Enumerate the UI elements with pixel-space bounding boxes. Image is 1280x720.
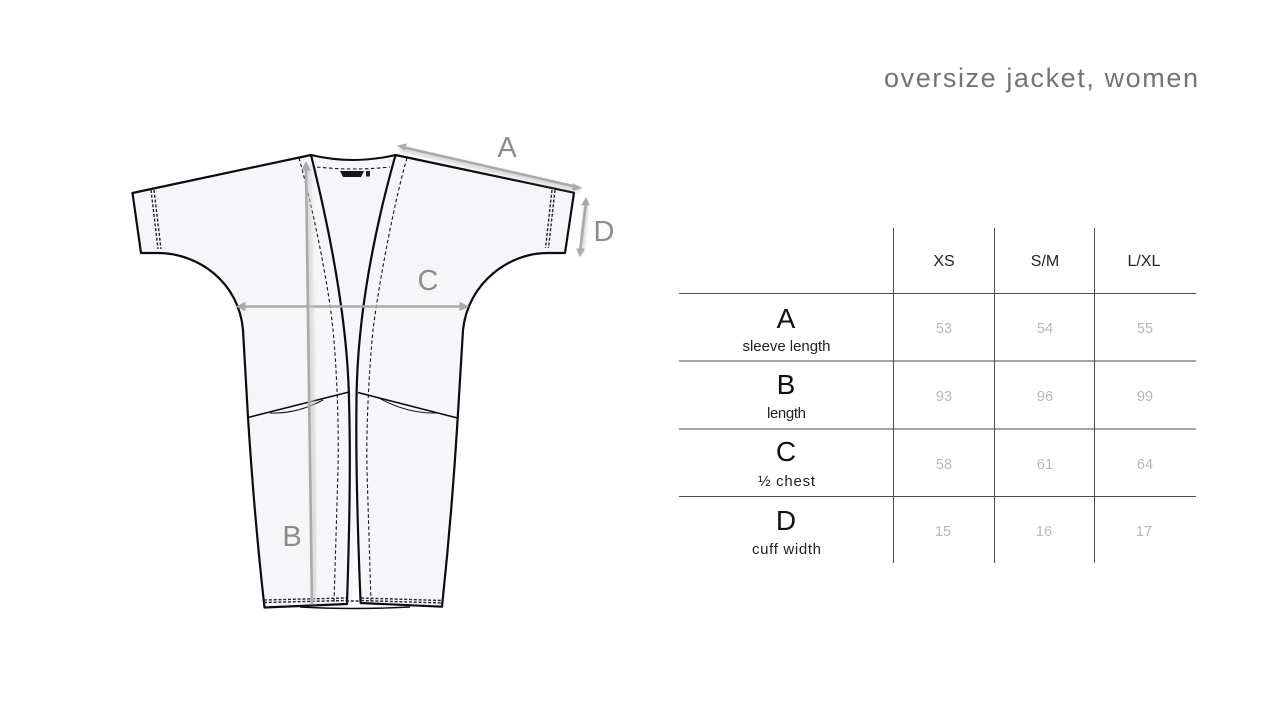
row A: sleeve length: 53: [936, 321, 952, 337]
neck stitching: [317, 167, 390, 169]
left pocket: [248, 392, 349, 418]
row B: length: 93: [936, 389, 952, 405]
right cuff stitching: [546, 190, 555, 248]
jacket technical drawing: [132, 155, 574, 608]
measurement B arrow: [302, 162, 315, 604]
right pocket: [358, 392, 458, 418]
neckline: [311, 155, 396, 160]
table grid: [679, 228, 1196, 563]
left jacket panel: [132, 155, 350, 608]
row D: cuff width: cuff width: [752, 541, 821, 558]
measurement A arrow: [398, 144, 581, 190]
back hem: [300, 607, 410, 608]
row D: cuff width: [752, 505, 1152, 558]
row D: cuff width: 17: [1136, 524, 1152, 540]
measurement B letter: B: [282, 521, 302, 553]
row A: sleeve length: 55: [1137, 321, 1153, 337]
row A: sleeve length: 54: [1037, 321, 1053, 337]
row D: cuff width: 16: [1036, 524, 1052, 540]
right jacket panel: [356, 155, 574, 607]
row B: length: B: [777, 369, 795, 400]
row D: cuff width: D: [776, 505, 796, 536]
measurement D arrow: [577, 198, 589, 256]
left front stitching: [299, 158, 338, 603]
right front stitching: [367, 158, 407, 603]
measurement A letter: A: [497, 132, 517, 164]
row D: cuff width: 15: [935, 524, 951, 540]
row C: half chest: ½ chest: [758, 473, 816, 490]
header row: S/M: [1031, 253, 1059, 270]
row C: half chest: 58: [936, 457, 952, 473]
row A: sleeve length: [742, 303, 1153, 355]
header row: L/XL: [1128, 253, 1161, 270]
row C: half chest: 64: [1137, 457, 1153, 473]
jacket back lining: [300, 155, 396, 607]
row A: sleeve length: sleeve length: [742, 338, 830, 355]
row B: length: 99: [1137, 389, 1153, 405]
header row: [933, 253, 1161, 270]
measurement C arrow: [237, 302, 468, 310]
measurement C letter: C: [418, 265, 438, 297]
neck label: [340, 171, 364, 177]
row C: half chest: 61: [1037, 457, 1053, 473]
row B: length: length: [767, 405, 806, 422]
header row: XS: [933, 253, 955, 270]
row C: half chest: [758, 436, 1153, 490]
row B: length: 96: [1037, 389, 1053, 405]
title: oversize jacket, women: [884, 63, 1198, 93]
size tag: [366, 171, 370, 176]
left cuff stitching: [151, 190, 161, 249]
hem stitching: [264, 598, 442, 603]
row A: sleeve length: A: [777, 303, 796, 334]
size table: [679, 228, 1196, 563]
row B: length: [767, 369, 1153, 422]
row C: half chest: C: [776, 436, 796, 467]
measurement D letter: D: [594, 216, 614, 248]
